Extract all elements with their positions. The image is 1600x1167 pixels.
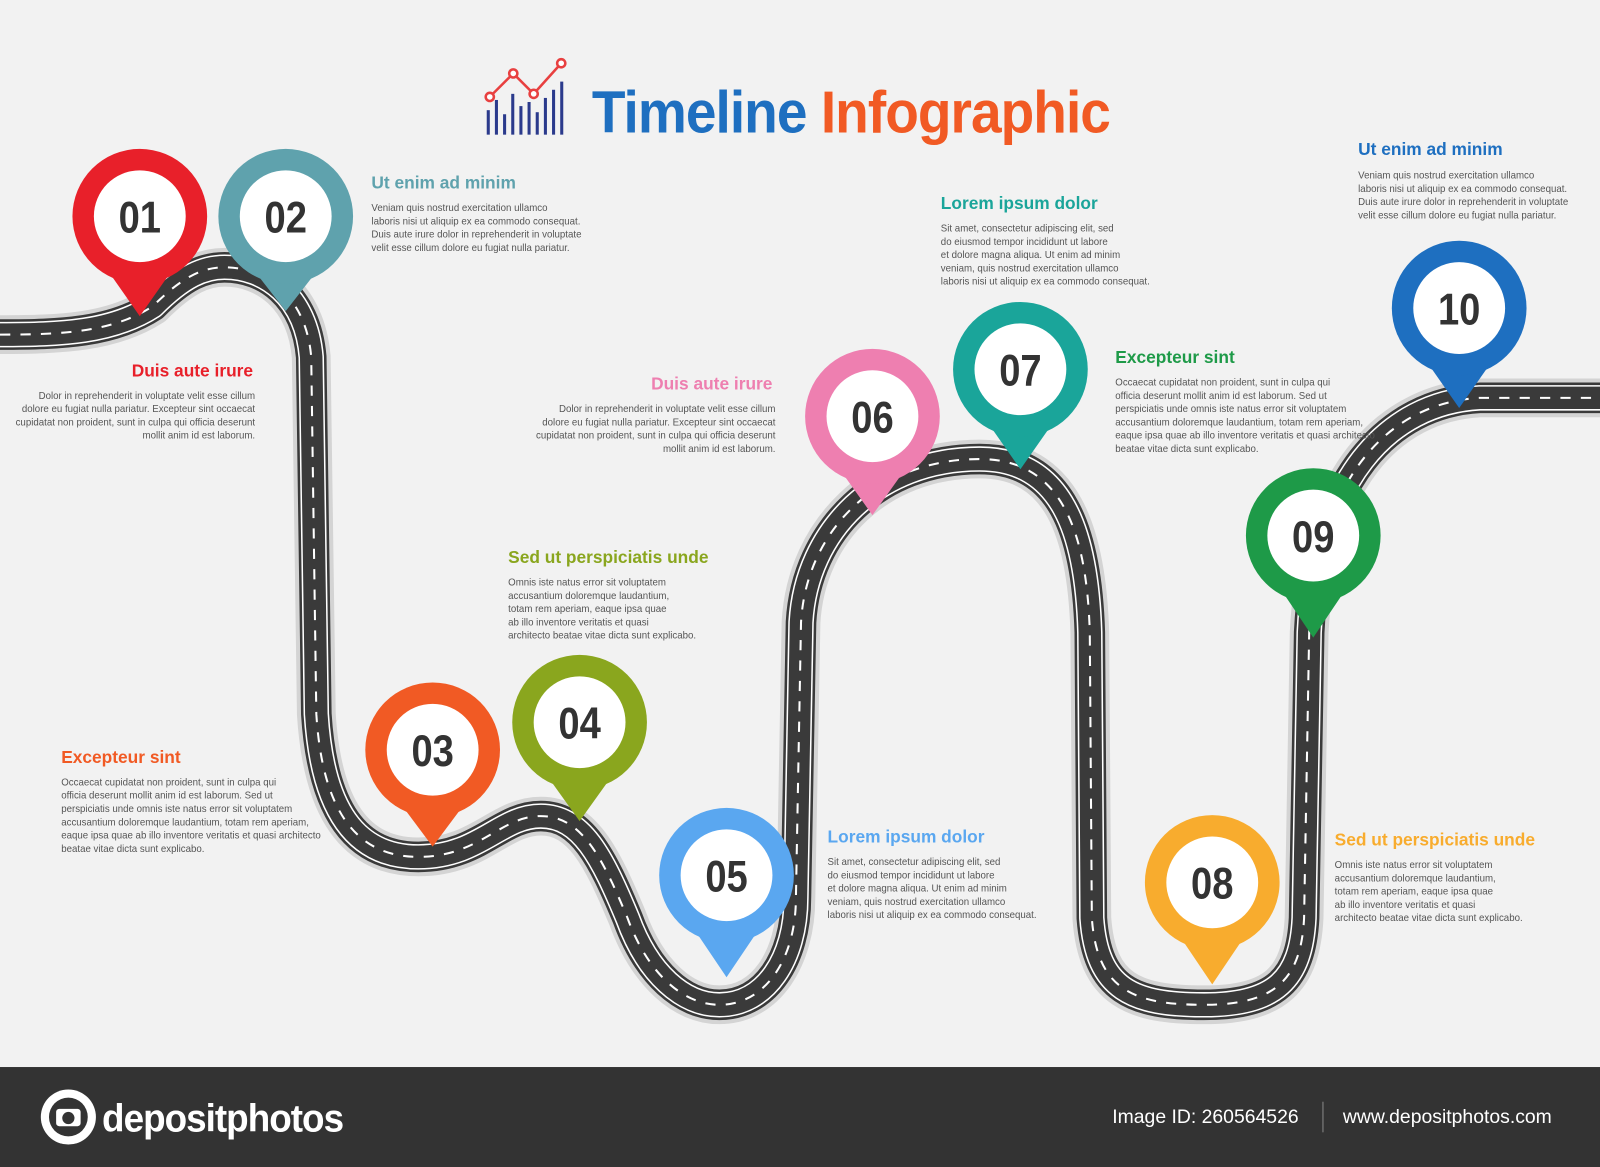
text 03: perspiciatis unde omnis iste natus error sit voluptatem (61, 804, 292, 815)
text 06: Dolor in reprehenderit in voluptate velit esse cillum (559, 404, 776, 415)
text 02: Veniam quis nostrud exercitation ullamco (371, 203, 548, 214)
text 01: mollit anim id est laborum. (143, 431, 255, 442)
text 08: architecto beatae vitae dicta sunt explicabo. (1335, 913, 1523, 924)
text 08: Omnis iste natus error sit voluptatem (1335, 860, 1492, 871)
text 06: mollit anim id est laborum. (663, 444, 776, 455)
text 10 (1358, 139, 1568, 221)
text 01: Dolor in reprehenderit in voluptate velit esse cillum (39, 391, 255, 402)
text 04: ab illo inventore veritatis et quasi (508, 617, 649, 628)
text 08: Sed ut perspiciatis unde (1335, 830, 1535, 850)
text 09: eaque ipsa quae ab illo inventore veritatis et quasi architecto (1115, 431, 1375, 442)
text 09: Occaecat cupidatat non proident, sunt in culpa qui (1115, 378, 1330, 389)
text 09: beatae vitae dicta sunt explicabo. (1115, 444, 1259, 455)
text 07: et dolore magna aliqua. Ut enim ad minim (941, 250, 1120, 261)
pin 05 (659, 808, 794, 977)
text 02: velit esse cillum dolore eu fugiat nulla pariatur. (371, 243, 570, 254)
text 02 (371, 173, 581, 254)
text 09: perspiciatis unde omnis iste natus error sit voluptatem (1115, 404, 1346, 415)
road (0, 267, 1600, 1005)
text 01 (16, 360, 255, 442)
pin 06: 06 (851, 392, 894, 442)
pin 03 (365, 682, 500, 847)
text 09: Excepteur sint (1115, 347, 1235, 367)
text 03: eaque ipsa quae ab illo inventore veritatis et quasi architecto (61, 831, 321, 842)
text 08: ab illo inventore veritatis et quasi (1335, 900, 1475, 911)
text 04: totam rem aperiam, eaque ipsa quae (508, 604, 667, 615)
text 01: cupidatat non proident, sunt in culpa qui officia deserunt (16, 417, 255, 428)
text 10: velit esse cillum dolore eu fugiat nulla pariatur. (1358, 210, 1556, 221)
pin 01: 01 (119, 192, 161, 242)
text 03: officia deserunt mollit anim id est laborum. Sed ut (61, 791, 273, 802)
text 03: beatae vitae dicta sunt explicabo. (61, 844, 205, 855)
text 08: accusantium doloremque laudantium, (1335, 873, 1496, 884)
footer bar: depositphotos (102, 1097, 343, 1141)
text 10: Ut enim ad minim (1358, 139, 1503, 159)
text 07: do eiusmod tempor incididunt ut labore (941, 237, 1108, 248)
pin 04 (512, 655, 647, 821)
text 08: totam rem aperiam, eaque ipsa quae (1335, 887, 1493, 898)
text 05 (828, 827, 1037, 921)
text 07: Sit amet, consectetur adipiscing elit, sed (941, 224, 1114, 235)
text 10: Duis aute irure dolor in reprehenderit in voluptate (1358, 197, 1568, 208)
text 06: Duis aute irure (651, 374, 773, 394)
text 02: laboris nisi ut aliquip ex ea commodo consequat. (371, 216, 580, 227)
text 03: accusantium doloremque laudantium, totam rem aperiam, (61, 817, 309, 828)
text 04: architecto beatae vitae dicta sunt explicabo. (508, 631, 696, 642)
text 06 (536, 374, 776, 455)
pin 03: 03 (411, 725, 454, 776)
text 03 (61, 747, 321, 855)
text 09 (1115, 347, 1375, 455)
pin 09 (1246, 468, 1381, 638)
footer bar: Image ID: 260564526 (1112, 1106, 1299, 1128)
pin 07 (953, 302, 1088, 469)
text 04: Sed ut perspiciatis unde (508, 547, 709, 567)
text 02: Duis aute irure dolor in reprehenderit in voluptate (371, 230, 581, 241)
text 01: Duis aute irure (132, 360, 253, 380)
pin 04: 04 (558, 698, 601, 748)
text 06: cupidatat non proident, sunt in culpa qui officia deserunt (536, 431, 776, 442)
text 03: Excepteur sint (61, 747, 181, 767)
pin 09: 09 (1292, 511, 1334, 562)
title: Timeline Infographic (592, 80, 1110, 146)
pin 08: 08 (1191, 858, 1233, 908)
pin 08 (1145, 815, 1280, 984)
text 05: Lorem ipsum dolor (828, 827, 985, 847)
text 07: veniam, quis nostrud exercitation ullamco (941, 263, 1119, 274)
text 05: laboris nisi ut aliquip ex ea commodo consequat. (828, 910, 1037, 921)
text 06: dolore eu fugiat nulla pariatur. Excepteur sint occaecat (542, 417, 776, 428)
text 07 (941, 193, 1150, 288)
text 10: laboris nisi ut aliquip ex ea commodo consequat. (1358, 184, 1567, 195)
pin 05: 05 (705, 851, 748, 901)
text 09: accusantium doloremque laudantium, totam rem aperiam, (1115, 417, 1363, 428)
text 05: do eiusmod tempor incididunt ut labore (828, 870, 995, 881)
text 04: Omnis iste natus error sit voluptatem (508, 578, 666, 589)
pin 07: 07 (999, 345, 1042, 395)
pin 01 (72, 149, 207, 316)
text 05: Sit amet, consectetur adipiscing elit, sed (828, 857, 1000, 868)
text 10: Veniam quis nostrud exercitation ullamco (1358, 171, 1534, 182)
text 07: laboris nisi ut aliquip ex ea commodo consequat. (941, 277, 1150, 288)
pin 10 (1392, 241, 1527, 408)
text 05: et dolore magna aliqua. Ut enim ad minim (828, 884, 1007, 895)
text 01: dolore eu fugiat nulla pariatur. Excepteur sint occaecat (22, 404, 255, 415)
icon: chart (486, 59, 565, 135)
text 05: veniam, quis nostrud exercitation ullamco (828, 897, 1005, 908)
text 03: Occaecat cupidatat non proident, sunt in culpa qui (61, 777, 276, 788)
pin 10: 10 (1438, 283, 1480, 334)
text 04 (508, 547, 709, 642)
footer bar (0, 1067, 1600, 1167)
pin 06 (805, 349, 940, 515)
text 02: Ut enim ad minim (371, 173, 516, 193)
text 08 (1335, 830, 1535, 924)
text 07: Lorem ipsum dolor (941, 193, 1098, 213)
text 09: officia deserunt mollit anim id est laborum. Sed ut (1115, 391, 1327, 402)
footer bar: www.depositphotos.com (1342, 1106, 1552, 1128)
pin 02 (218, 149, 353, 311)
pin 02: 02 (264, 192, 307, 242)
text 04: accusantium doloremque laudantium, (508, 591, 669, 602)
